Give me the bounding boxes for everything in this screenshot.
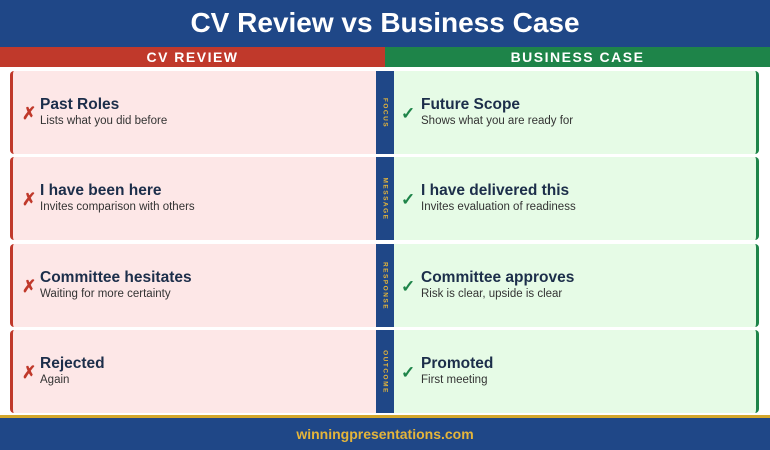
row 2 left card: I have been here (40, 182, 161, 199)
row 1 left card: Lists what you did before (40, 115, 167, 127)
row 2 left card (10, 157, 376, 240)
row 1 left card: ✗ (22, 104, 36, 123)
row 4 right card (394, 330, 759, 413)
row 1 right card (394, 71, 759, 154)
row 3 label: RESPONSE (382, 261, 388, 310)
row 2 label (376, 157, 394, 240)
header: cv review: CV REVIEW (146, 49, 239, 65)
title: CV Review vs Business Case (190, 7, 580, 38)
row 4 left card: Again (40, 374, 69, 386)
row 2 left card: ✗ (22, 190, 36, 209)
header: cv review (0, 47, 385, 67)
row 4 right card: ✓ (401, 363, 415, 382)
row 3 right card: ✓ (401, 277, 415, 296)
row 3 left card: Committee hesitates (40, 269, 192, 286)
row 2 label: MESSAGE (382, 177, 388, 220)
row 4 label (376, 330, 394, 413)
row 4 right card: First meeting (421, 374, 487, 386)
row 1 left card (10, 71, 376, 154)
row 3 left card: ✗ (22, 277, 36, 296)
row 1 label (376, 71, 394, 154)
footer (0, 418, 770, 450)
row 4 label: OUTCOME (382, 350, 388, 393)
row 3 right card (394, 244, 759, 327)
row 3 right card: Risk is clear, upside is clear (421, 288, 562, 300)
row 1 right card: Future Scope (421, 96, 520, 113)
row 3 left card (10, 244, 376, 327)
row 2 right card (394, 157, 759, 240)
row 3 label (376, 244, 394, 327)
row 2 right card: ✓ (401, 190, 415, 209)
title (0, 0, 770, 47)
row 2 right card: Invites evaluation of readiness (421, 201, 576, 213)
row 1 right card: Shows what you are ready for (421, 115, 573, 127)
row 2 right card: I have delivered this (421, 182, 569, 199)
row 1 label: FOCUS (382, 97, 388, 128)
header: business case: BUSINESS CASE (511, 49, 644, 65)
row 4 right card: Promoted (421, 355, 493, 372)
row 3 right card: Committee approves (421, 269, 574, 286)
footer: winningpresentations.com (296, 426, 474, 442)
header: business case (385, 47, 770, 67)
row 1 right card: ✓ (401, 104, 415, 123)
row 1 left card: Past Roles (40, 96, 119, 113)
row 4 left card (10, 330, 376, 413)
row 4 left card: Rejected (40, 355, 105, 372)
row 2 left card: Invites comparison with others (40, 201, 195, 213)
row 4 left card: ✗ (22, 363, 36, 382)
row 3 left card: Waiting for more certainty (40, 288, 171, 300)
